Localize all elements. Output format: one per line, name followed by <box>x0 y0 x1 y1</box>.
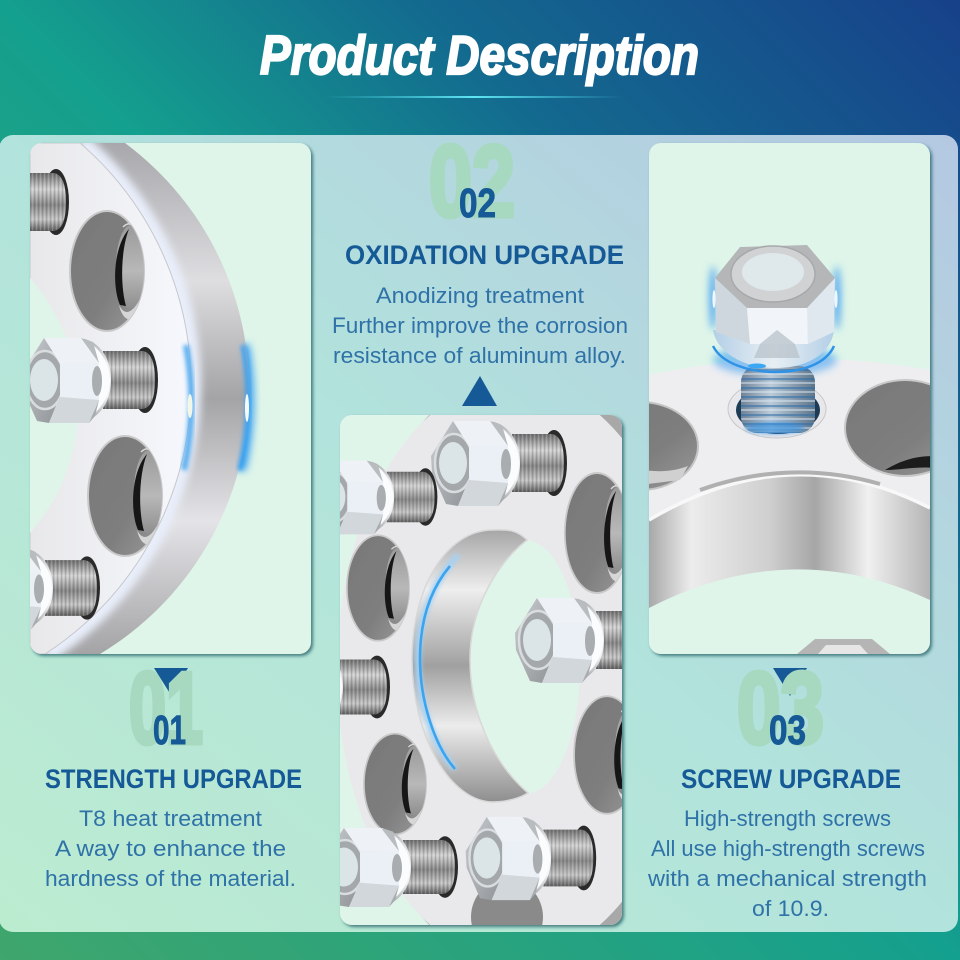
description: High-strength screws <box>684 806 891 831</box>
outer blue glow <box>240 345 248 470</box>
blue glow on face edge <box>184 345 192 470</box>
panel: screw image <box>648 142 934 658</box>
section 01: strength <box>45 653 302 891</box>
description <box>45 806 296 891</box>
mounting holes <box>347 473 642 955</box>
blue edge highlight <box>240 345 249 470</box>
number 01 <box>129 653 203 765</box>
ring inner band <box>649 475 930 608</box>
description: Anodizing treatment <box>376 283 585 308</box>
arrow: screw pointer <box>773 668 807 696</box>
heading: SCREW UPGRADE <box>681 764 901 794</box>
description: with a mechanical strength <box>647 866 927 891</box>
ring holes <box>649 379 930 490</box>
description <box>332 283 628 368</box>
centre bore <box>470 540 580 794</box>
section 03: screw <box>647 653 927 921</box>
section 02: oxidation <box>332 126 628 368</box>
number 02: 02 <box>429 126 515 238</box>
title: Product Description <box>260 24 699 86</box>
description <box>647 806 927 921</box>
arrow: oxidation pointer <box>462 376 497 406</box>
bolt glow <box>710 266 840 376</box>
title underline <box>325 96 623 98</box>
ring front face <box>340 415 622 925</box>
description: A way to enhance the <box>55 836 286 861</box>
description: resistance of aluminum alloy. <box>333 343 626 368</box>
heading: OXIDATION UPGRADE <box>345 240 624 270</box>
arrow: strength pointer <box>154 668 188 695</box>
number 01: 01 <box>129 653 203 765</box>
description: T8 heat treatment <box>79 806 263 831</box>
main bolt <box>713 245 835 438</box>
lower bolt head <box>797 639 890 654</box>
number 03: 03 <box>769 707 806 753</box>
ring top surface <box>649 359 930 530</box>
description: Further improve the corrosion <box>332 313 628 338</box>
description: hardness of the material. <box>45 866 296 891</box>
number 03: 03 <box>737 653 824 765</box>
ring front face <box>30 143 191 654</box>
number 01: 01 <box>153 707 186 753</box>
ring side corners <box>422 415 622 925</box>
blue sparks <box>712 290 838 368</box>
face edge soft glow <box>45 143 191 654</box>
number 02: 02 <box>459 180 496 226</box>
panel: oxidation image <box>340 414 626 930</box>
bolts <box>254 421 651 907</box>
description: of 10.9. <box>752 896 829 921</box>
bolts <box>30 169 158 630</box>
band rim highlight <box>649 472 930 520</box>
centre bore <box>30 278 78 533</box>
panel: strength image <box>0 143 311 654</box>
mounting holes <box>70 211 164 556</box>
heading: STRENGTH UPGRADE <box>45 764 302 794</box>
blue highlight arc <box>418 555 458 769</box>
bore inner wall <box>412 530 528 802</box>
description: All use high-strength screws <box>651 836 925 861</box>
ring side band <box>30 143 249 654</box>
